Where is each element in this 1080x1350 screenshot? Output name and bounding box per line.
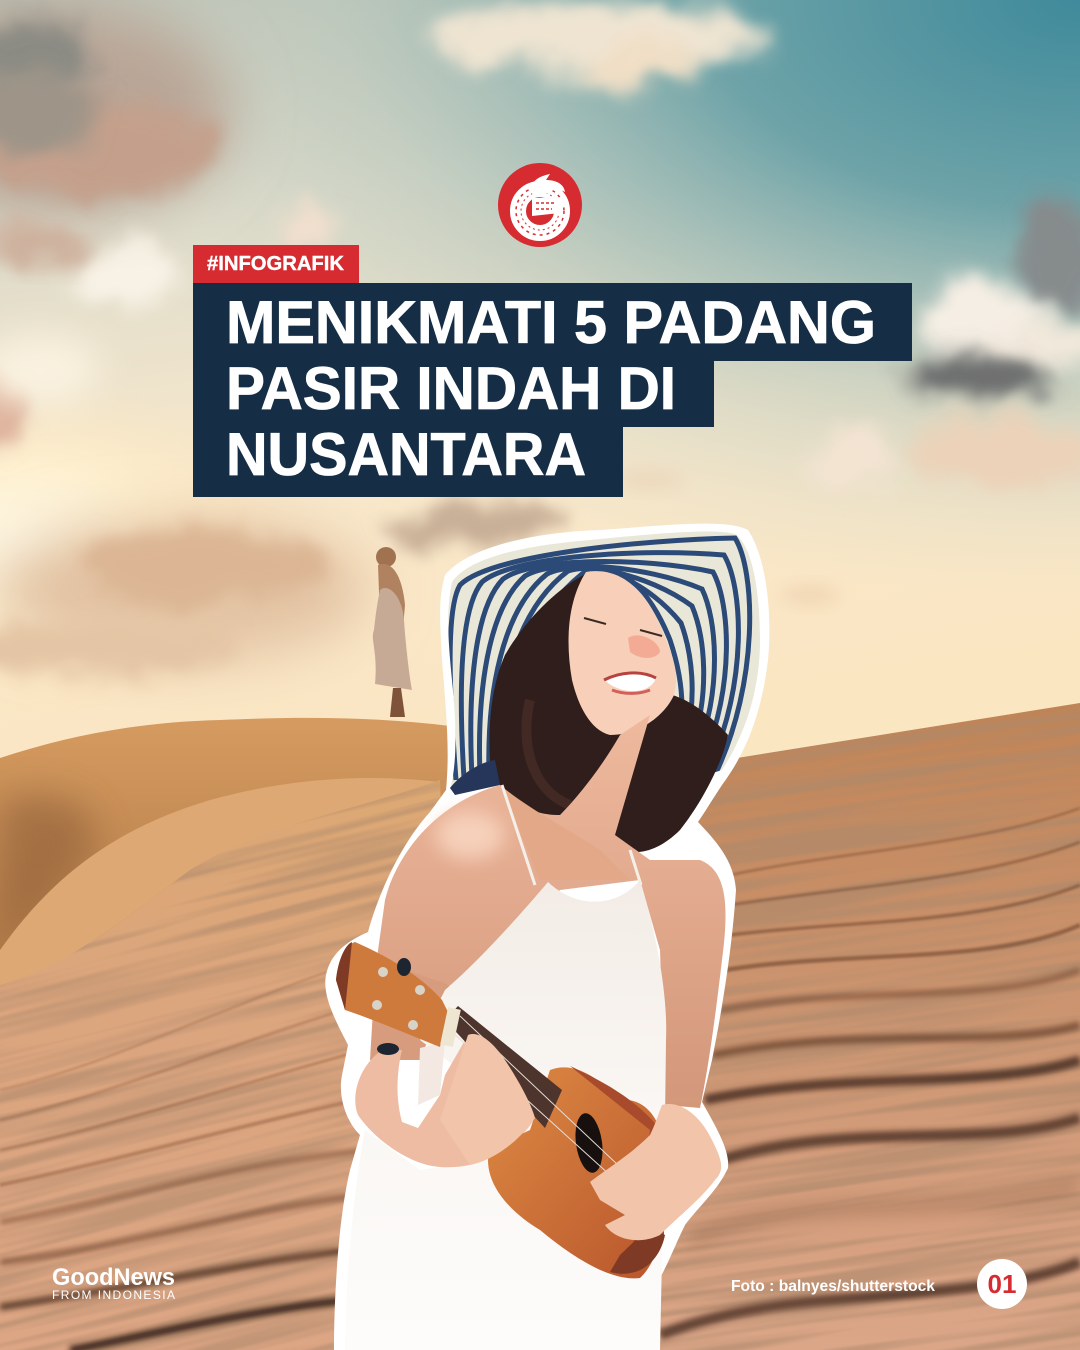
figure on dune xyxy=(373,547,412,717)
woman with hat and ukulele xyxy=(325,520,770,1350)
clouds xyxy=(0,4,1080,678)
page number badge: 01 xyxy=(988,1269,1016,1299)
tag: #INFOGRAFIK: #INFOGRAFIK xyxy=(207,253,345,275)
fretting hand xyxy=(440,1034,535,1165)
upper arm behind ukulele xyxy=(370,960,450,1060)
title text: PASIR INDAH DI xyxy=(226,355,676,422)
background: right rippled dune xyxy=(640,703,1080,1350)
hair xyxy=(490,572,728,852)
sound hole xyxy=(572,1111,606,1175)
background: sky xyxy=(0,0,1080,780)
forearm xyxy=(355,1035,535,1167)
white cut-out outline xyxy=(325,524,769,1350)
photo credit: Foto : balnyes/shutterstock xyxy=(731,1278,935,1295)
lace sleeve xyxy=(418,1042,445,1105)
page number badge xyxy=(977,1259,1027,1309)
title text xyxy=(226,289,876,488)
background: middle rippled dune xyxy=(0,780,460,1350)
title text: NUSANTARA xyxy=(226,421,586,488)
tuning pegs xyxy=(372,958,425,1055)
brand: GoodNews from Indonesia: GoodNews xyxy=(52,1264,175,1291)
logo: GoodNews from Indonesia emblem xyxy=(498,163,582,247)
ukulele headstock xyxy=(336,942,448,1047)
dress xyxy=(345,880,666,1350)
title panel xyxy=(193,283,912,497)
brand: GoodNews from Indonesia: FROM INDONESIA xyxy=(52,1288,175,1302)
ukulele body xyxy=(488,1067,665,1278)
title text: MENIKMATI 5 PADANG xyxy=(226,289,876,356)
neck and shoulders xyxy=(376,715,726,1108)
hat xyxy=(448,532,760,790)
dress straps xyxy=(502,785,641,885)
face xyxy=(569,571,676,735)
strumming hand xyxy=(590,1104,721,1240)
background: left dune with figure xyxy=(0,718,450,985)
ukulele neck xyxy=(445,1006,562,1128)
tag: #INFOGRAFIK xyxy=(193,245,359,283)
